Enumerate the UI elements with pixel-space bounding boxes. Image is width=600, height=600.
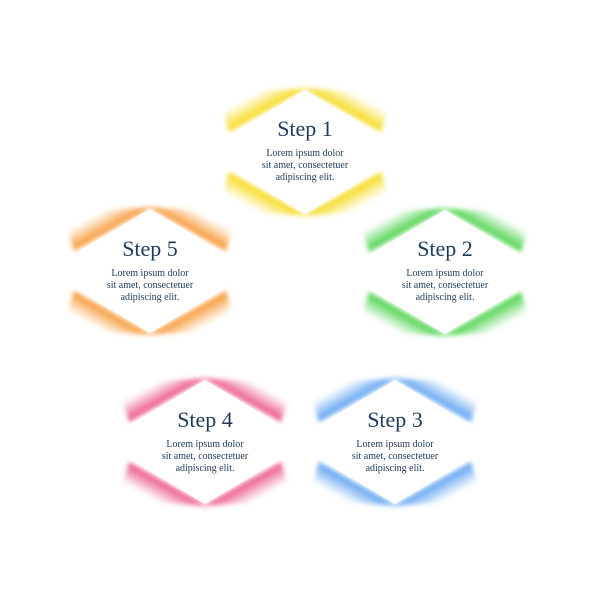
step 3 text: sit amet, consectetuer — [352, 451, 439, 462]
step 3 text: adipiscing elit. — [366, 463, 424, 474]
step 5 hexagon — [68, 207, 232, 335]
step 2 text: Lorem ipsum dolor — [406, 268, 484, 279]
step 5 text: sit amet, consectetuer — [107, 280, 194, 291]
step 4 text: sit amet, consectetuer — [162, 451, 249, 462]
step 5 text — [107, 268, 194, 303]
step 1 text: sit amet, consectetuer — [262, 160, 349, 171]
step 4 text: adipiscing elit. — [176, 463, 234, 474]
step 1 title: Step 1 — [277, 116, 333, 141]
step 5 text: adipiscing elit. — [121, 292, 179, 303]
step 5 text: Lorem ipsum dolor — [111, 268, 189, 279]
step 1 text — [262, 148, 349, 183]
step 3 text: Lorem ipsum dolor — [356, 439, 434, 450]
step 4 title: Step 4 — [177, 407, 233, 432]
step 3 hexagon — [313, 378, 477, 506]
step 3 text — [352, 439, 439, 474]
step 4 text — [162, 439, 249, 474]
step 2 text: adipiscing elit. — [416, 292, 474, 303]
step 2 text — [402, 268, 489, 303]
step 3 title: Step 3 — [367, 407, 423, 432]
step 2 hexagon — [363, 208, 527, 336]
step 1 text: adipiscing elit. — [276, 172, 334, 183]
step 1 text: Lorem ipsum dolor — [266, 148, 344, 159]
step 1 hexagon — [223, 88, 387, 216]
step 4 hexagon — [123, 378, 287, 506]
step 2 title: Step 2 — [417, 236, 473, 261]
step 4 text: Lorem ipsum dolor — [166, 439, 244, 450]
step 2 text: sit amet, consectetuer — [402, 280, 489, 291]
step 5 title: Step 5 — [122, 236, 178, 261]
